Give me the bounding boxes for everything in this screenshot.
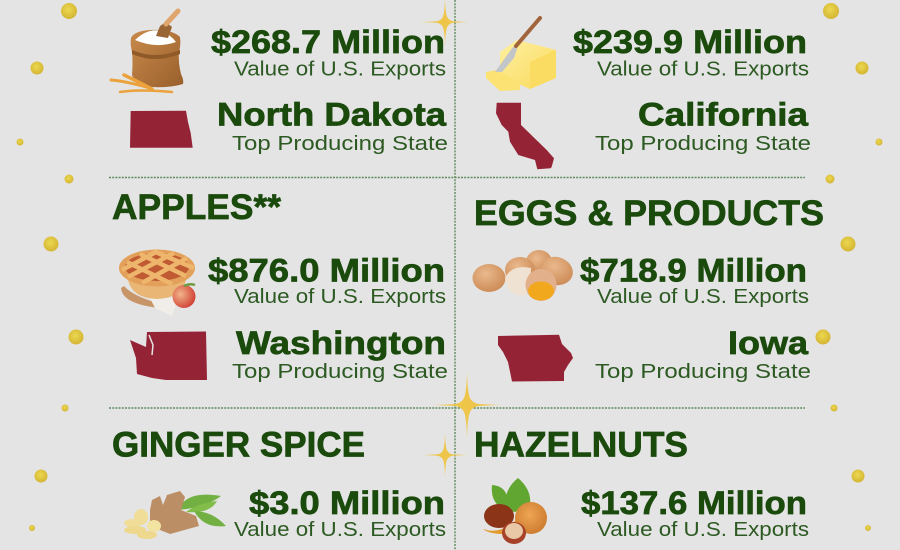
value: $718.9 Million — [580, 252, 807, 288]
icon: Washington — [130, 332, 207, 380]
caption: Top Producing State — [232, 360, 448, 383]
icon: gold sparkle top — [420, 0, 470, 47]
caption: Value of U.S. Exports — [234, 285, 446, 308]
icon: butter — [486, 18, 556, 91]
left column of gold glitter dots — [16, 3, 84, 531]
state name: California — [638, 96, 808, 132]
icon: hazelnuts — [483, 478, 547, 544]
heading: APPLES** — [112, 188, 281, 227]
panel: butter — [486, 18, 811, 169]
panel: ginger — [112, 426, 446, 541]
value: $137.6 Million — [581, 485, 807, 521]
icon: ginger — [124, 491, 226, 539]
icon: North Dakota — [130, 111, 193, 148]
icon: California — [496, 103, 554, 169]
panel: eggs — [472, 194, 824, 383]
icon: eggs — [472, 250, 576, 301]
heading: HAZELNUTS — [474, 426, 688, 464]
caption: Value of U.S. Exports — [597, 58, 809, 80]
icon: gold sparkle lower — [422, 432, 468, 478]
icon: gold sparkle middle — [432, 371, 502, 439]
value: $239.9 Million — [573, 24, 807, 60]
panel: flour — [111, 11, 448, 155]
value: $876.0 Million — [208, 252, 445, 288]
icon: Iowa — [498, 335, 573, 382]
icon: flour sack — [111, 11, 183, 92]
caption: Value of U.S. Exports — [597, 518, 809, 541]
panel: hazelnuts — [474, 426, 809, 544]
heading: GINGER SPICE — [112, 426, 365, 464]
panel: apples — [112, 188, 448, 383]
caption: Value of U.S. Exports — [234, 58, 446, 80]
state name: Washington — [236, 325, 446, 361]
icon: apple pie — [119, 250, 196, 316]
value: $3.0 Million — [249, 485, 445, 521]
right column of gold glitter dots — [816, 3, 882, 531]
heading: EGGS & PRODUCTS — [474, 194, 824, 233]
caption: Top Producing State — [595, 132, 811, 155]
caption: Value of U.S. Exports — [234, 518, 446, 541]
state name: Iowa — [728, 325, 808, 361]
value: $268.7 Million — [211, 24, 445, 60]
caption: Top Producing State — [232, 132, 448, 155]
caption: Value of U.S. Exports — [597, 285, 809, 308]
caption: Top Producing State — [595, 360, 811, 383]
state name: North Dakota — [217, 96, 446, 132]
